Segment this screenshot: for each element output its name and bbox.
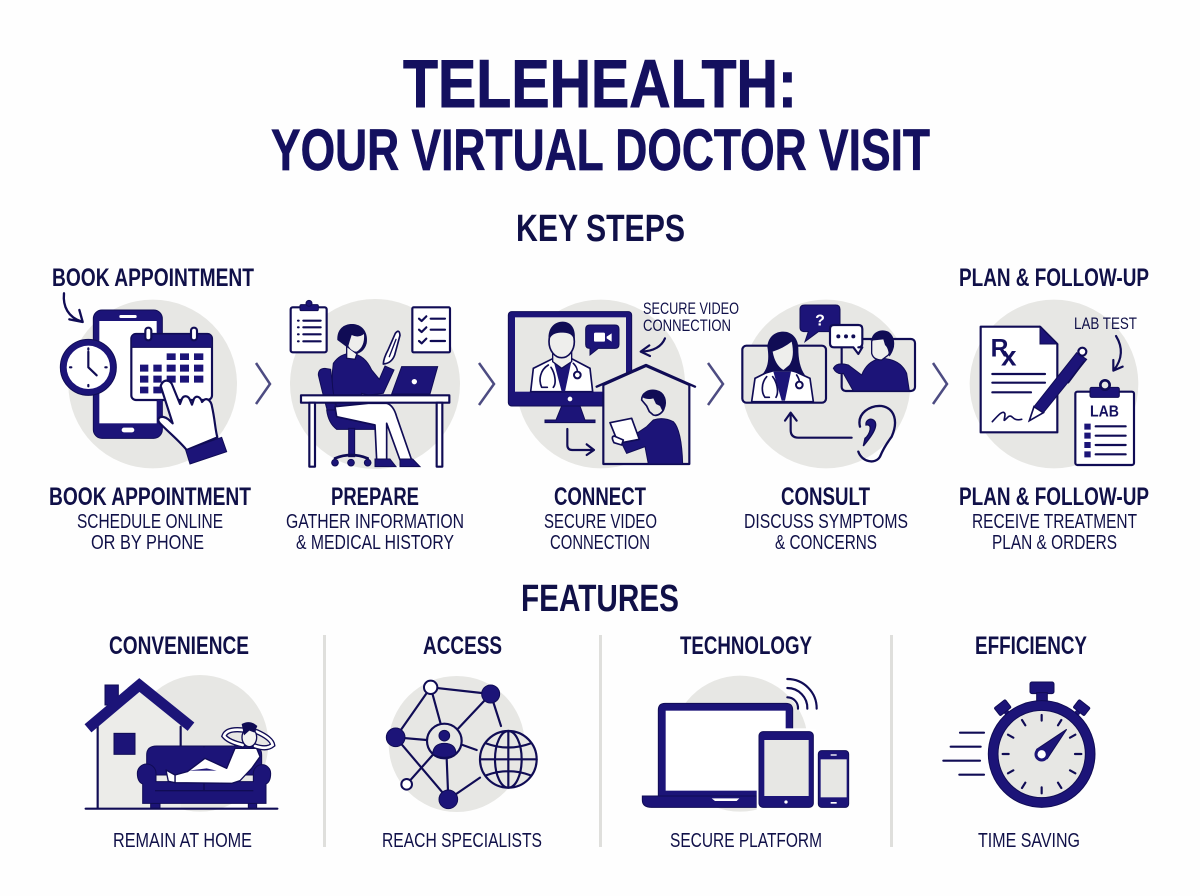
arrow: step 2 to 3 — [479, 363, 494, 405]
step text: consult — [744, 483, 908, 554]
icon: book appointment — [60, 293, 237, 468]
label: book appointment top: BOOK APPOINTMENT — [52, 264, 254, 292]
icon: house and sofa — [86, 675, 277, 812]
arrow: step 3 to 4 — [708, 363, 723, 405]
step text: prepare: PREPARE — [331, 483, 419, 511]
feature: convenience — [86, 632, 277, 852]
step text: prepare: GATHER INFORMATION — [286, 511, 464, 533]
icon: connect — [508, 300, 695, 468]
title — [271, 46, 930, 183]
step text: connect: CONNECT — [554, 483, 646, 511]
step text: prepare: & MEDICAL HISTORY — [296, 532, 454, 554]
step text: consult: & CONCERNS — [775, 532, 877, 554]
label: secure video connection: CONNECTION — [643, 317, 731, 335]
heading: features: FEATURES — [521, 578, 679, 620]
feature: access — [382, 632, 542, 852]
icon: consult: ? — [815, 313, 825, 330]
step text: connect: CONNECTION — [550, 532, 650, 554]
heading: key steps: KEY STEPS — [516, 208, 685, 250]
feature: convenience: CONVENIENCE — [109, 632, 249, 660]
feature: efficiency: EFFICIENCY — [975, 632, 1087, 660]
label: secure video connection — [643, 300, 739, 335]
icon: prepare — [290, 299, 460, 469]
step text: plan and follow-up: RECEIVE TREATMENT — [972, 511, 1137, 533]
icon: connected devices — [642, 676, 849, 812]
feature: efficiency: TIME SAVING — [978, 830, 1080, 852]
step text: consult: DISCUSS SYMPTOMS — [744, 511, 908, 533]
step text: book appointment: SCHEDULE ONLINE — [77, 511, 223, 533]
step text: prepare — [286, 483, 464, 554]
icon: plan and follow-up: LAB — [1090, 404, 1119, 421]
icon: stopwatch — [943, 682, 1095, 807]
feature: technology: TECHNOLOGY — [680, 632, 812, 660]
icon: plan and follow-up — [970, 300, 1138, 468]
feature: convenience: REMAIN AT HOME — [113, 830, 252, 852]
label: secure video connection: SECURE VIDEO — [643, 300, 739, 318]
feature: efficiency — [943, 632, 1095, 852]
step text: book appointment — [49, 483, 251, 554]
step text: plan and follow-up — [959, 483, 1149, 554]
title: TELEHEALTH: — [403, 46, 797, 122]
label: lab test: LAB TEST — [1074, 315, 1137, 333]
step text: book appointment: OR BY PHONE — [91, 532, 204, 554]
step text: connect: SECURE VIDEO — [544, 511, 657, 533]
icon: plan and follow-up: R — [991, 336, 1009, 363]
arrow: step 1 to 2 — [256, 363, 270, 404]
step text: plan and follow-up: PLAN & ORDERS — [992, 532, 1117, 554]
step text: book appointment: BOOK APPOINTMENT — [49, 483, 251, 511]
feature: technology: SECURE PLATFORM — [670, 830, 822, 852]
feature: technology — [642, 632, 849, 852]
feature: access: REACH SPECIALISTS — [382, 830, 542, 852]
feature: access: ACCESS — [423, 632, 502, 660]
arrow: step 4 to 5 — [933, 363, 947, 404]
icon: consult — [742, 300, 915, 468]
step text: connect — [544, 483, 657, 554]
title: YOUR VIRTUAL DOCTOR VISIT — [271, 118, 930, 183]
icon: specialist network and globe — [386, 676, 537, 812]
step text: consult: CONSULT — [781, 483, 870, 511]
icon: plan and follow-up: x — [1001, 340, 1017, 371]
